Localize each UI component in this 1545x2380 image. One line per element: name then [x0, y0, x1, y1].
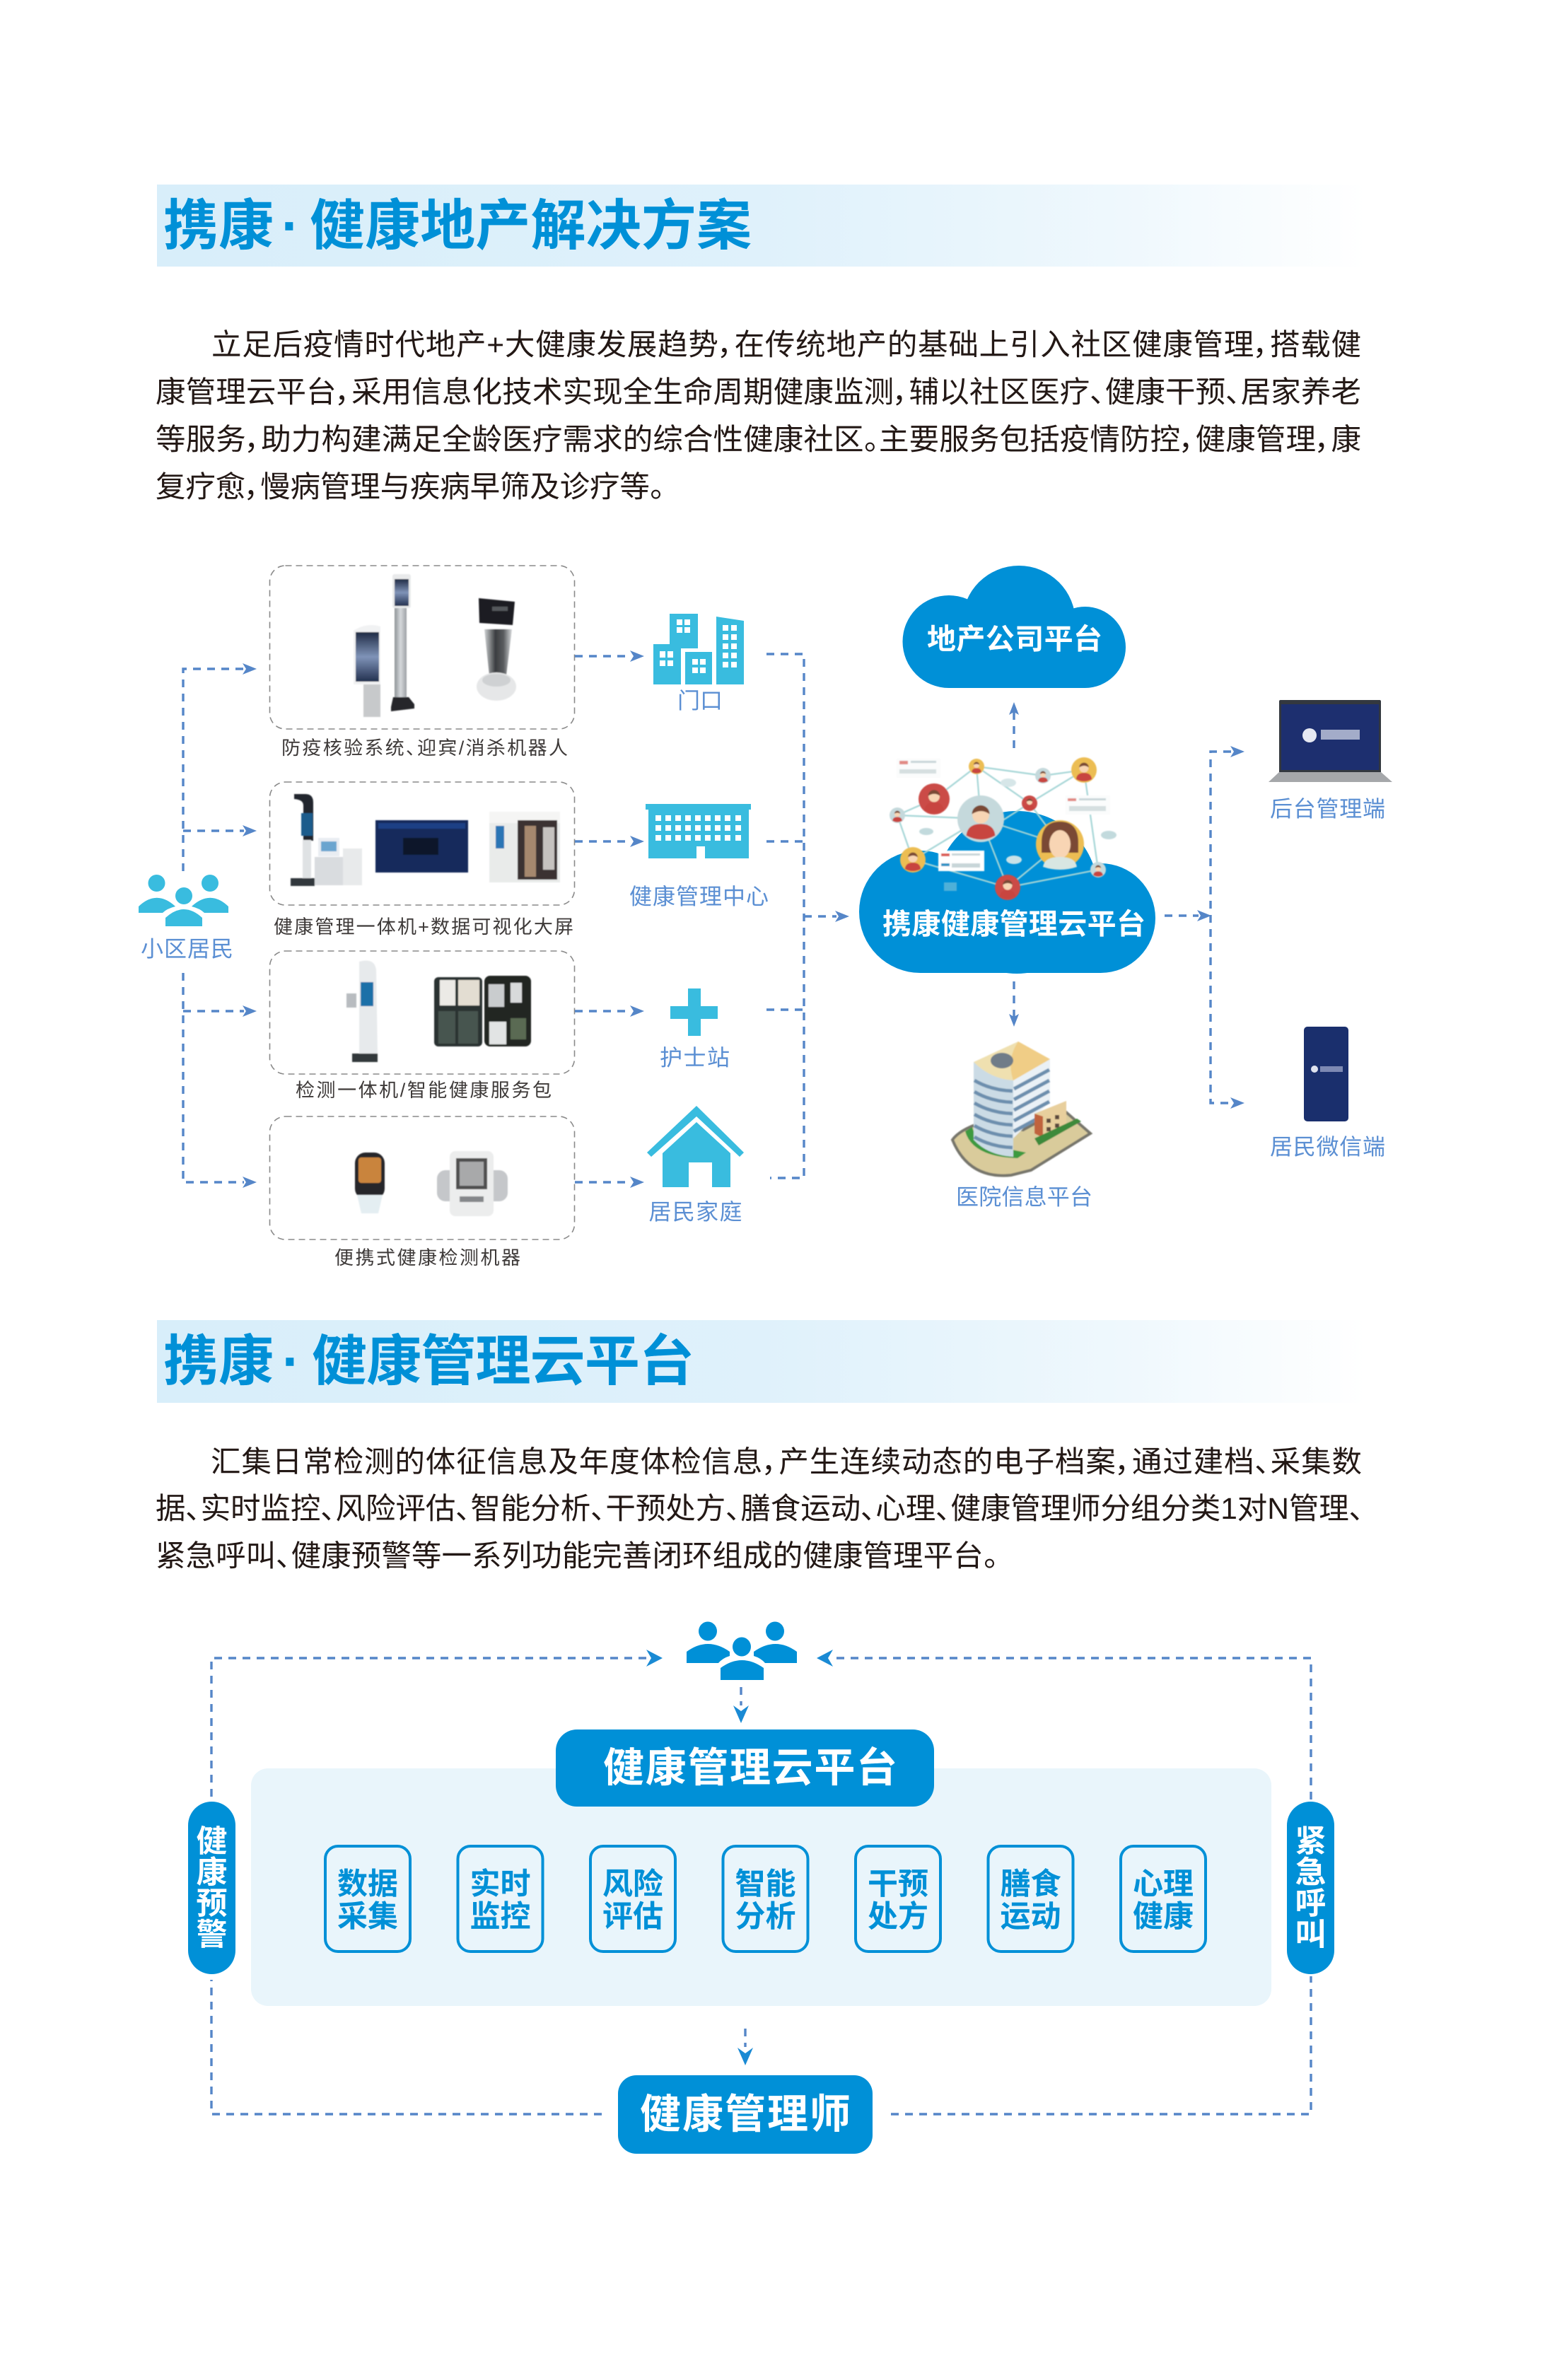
label: nurse station: 护士站: [660, 1045, 730, 1071]
pill: early warning: [188, 1802, 235, 1974]
connector: cloud platform to admin and WeChat clients: [1165, 746, 1244, 1109]
module: mental health: [1121, 1846, 1206, 1952]
cloud label: 地产公司平台: [927, 623, 1102, 655]
loop connector: health manager to early warning: [211, 1980, 602, 2114]
header: health management cloud platform: [556, 1729, 934, 1807]
title: 携康·健康管理云平台: 携康: [163, 1330, 274, 1392]
pill: early warning: 健: [197, 1824, 228, 1859]
box: health manager: [618, 2075, 873, 2154]
cloud: Xiekang health management platform: [859, 757, 1155, 974]
label: residents: 小区居民: [141, 936, 233, 962]
connector: access points to cloud platform: [766, 654, 849, 1178]
section banner: cloud platform: [157, 1320, 1366, 1403]
pill: emergency call: [1287, 1802, 1334, 1974]
module: intelligent analysis: 分析: [735, 1900, 796, 1934]
module: diet and exercise: [989, 1846, 1073, 1952]
module: data collection: [325, 1846, 410, 1952]
module: real-time monitoring: 实时: [470, 1867, 530, 1901]
module: diet and exercise: 运动: [1000, 1900, 1061, 1934]
intro paragraph 1: [156, 329, 1361, 504]
loop connector: health manager to emergency call: [891, 1976, 1311, 2114]
device photos: kiosk, dashboard, cabin: [291, 794, 560, 886]
device photos: kiosk, bag: [346, 960, 531, 1062]
module: intervention prescription: 处方: [868, 1900, 928, 1934]
module: intervention prescription: 干预: [868, 1867, 928, 1901]
title: 携康·健康地产解决方案: ·: [281, 194, 300, 257]
caption: epidemic devices: 防疫核验系统、迎宾/消杀机器人: [281, 737, 568, 759]
pill: emergency call: 呼: [1295, 1886, 1327, 1921]
caption: detection kiosk and service bag: 检测一体机/智能健康服务包: [296, 1080, 552, 1101]
panel: epidemic devices: [270, 566, 574, 729]
intro paragraph 2: 紧急呼叫、健康预警等一系列功能完善闭环组成的健康管理平台。: [156, 1540, 998, 1573]
icon: nurse station plus: [670, 988, 718, 1036]
label: resident WeChat client: 居民微信端: [1270, 1134, 1385, 1160]
pill: emergency call: 紧: [1295, 1824, 1327, 1859]
panel: detection kiosk and service bag: [270, 951, 574, 1074]
header: health management cloud platform: 健康管理云平台: [603, 1745, 897, 1791]
icon: residents: [139, 875, 228, 926]
arrow: cloud platform up to real estate platform: [1009, 702, 1019, 748]
arrow: cloud platform down to hospital: [1009, 981, 1019, 1027]
icon: gate buildings: [653, 614, 744, 684]
panel: platform modules background: [251, 1768, 1271, 2006]
label: admin client: 后台管理端: [1270, 796, 1385, 822]
section banner: real estate solution: [157, 185, 1366, 267]
module: risk assessment: 风险: [602, 1867, 663, 1901]
icon: residents group: [687, 1622, 797, 1680]
caption: health kiosk and big screen: 健康管理一体机+数据可视化大屏: [274, 916, 573, 938]
intro paragraph 1: 立足后疫情时代地产+大健康发展趋势，在传统地产的基础上引入社区健康管理，搭载健: [211, 329, 1361, 362]
intro paragraph 2: 据、实时监控、风险评估、智能分析、干预处方、膳食运动、心理、健康管理师分组分类1对N管理、: [156, 1493, 1364, 1526]
pill: emergency call: 叫: [1295, 1918, 1327, 1952]
intro paragraph 1: 康管理云平台，采用信息化技术实现全生命周期健康监测，辅以社区医疗、健康干预、居家养老: [156, 376, 1361, 409]
module: diet and exercise: 膳食: [1000, 1867, 1061, 1901]
cloud label: 携康健康管理云平台: [882, 908, 1145, 940]
loop connector: emergency call to residents: [817, 1650, 1311, 1799]
connector: device groups to access points: [575, 651, 644, 1188]
loop connector: early warning to residents: [211, 1650, 663, 1797]
intro paragraph 1: 复疗愈，慢病管理与疾病早筛及诊疗等。: [156, 471, 665, 504]
module: real-time monitoring: 监控: [470, 1900, 530, 1934]
title: 携康·健康地产解决方案: 健康地产解决方案: [310, 194, 752, 257]
arrow: platform to health manager: [737, 2029, 753, 2065]
arrow: residents to platform: [733, 1687, 749, 1723]
title: 携康·健康管理云平台: ·: [282, 1330, 301, 1392]
icon: laptop: [1269, 700, 1392, 782]
module: intelligent analysis: 智能: [735, 1867, 796, 1901]
icon: phone: [1304, 1027, 1348, 1121]
label: resident home: 居民家庭: [649, 1199, 742, 1225]
label: hospital information platform: 医院信息平台: [956, 1184, 1092, 1210]
module: real-time monitoring: [458, 1846, 543, 1952]
panel: portable devices: [270, 1116, 574, 1239]
pill: early warning: 康: [197, 1855, 228, 1890]
caption: portable devices: 便携式健康检测机器: [334, 1247, 520, 1268]
module: mental health: 健康: [1133, 1900, 1194, 1934]
intro paragraph 1: 等服务，助力构建满足全龄医疗需求的综合性健康社区。主要服务包括疫情防控，健康管理，康: [156, 424, 1361, 457]
module: intervention prescription: [856, 1846, 940, 1952]
box: health manager: 健康管理师: [640, 2092, 851, 2137]
module: intelligent analysis: [723, 1846, 808, 1952]
module: risk assessment: [590, 1846, 675, 1952]
intro paragraph 2: 汇集日常检测的体征信息及年度体检信息，产生连续动态的电子档案，通过建档、采集数: [211, 1446, 1362, 1479]
pill: early warning: 警: [197, 1918, 228, 1952]
module: data collection: 数据: [337, 1867, 398, 1901]
device photos: glucose meter, blood pressure monitor: [355, 1151, 508, 1216]
title: 携康·健康地产解决方案: 携康: [163, 194, 274, 257]
connector: residents to device groups: [183, 663, 257, 1188]
title: 携康·健康管理云平台: 健康管理云平台: [312, 1330, 694, 1392]
module: data collection: 采集: [337, 1900, 398, 1934]
icon: resident home: [647, 1106, 744, 1187]
intro paragraph 2: [156, 1446, 1364, 1573]
label: health management center: 健康管理中心: [629, 884, 769, 909]
device photos: kiosk, stand, robot: [354, 574, 516, 717]
network illustration: [890, 757, 1117, 900]
pill: early warning: 预: [197, 1886, 228, 1921]
cloud: real estate platform: [902, 566, 1126, 688]
label: gate: 门口: [677, 688, 723, 713]
icon: health management center: [646, 804, 751, 858]
illustration: hospital building: [952, 1042, 1090, 1176]
module: mental health: 心理: [1133, 1867, 1194, 1901]
panel: health kiosk and big screen: [270, 782, 574, 905]
module: risk assessment: 评估: [602, 1900, 663, 1934]
pill: emergency call: 急: [1295, 1855, 1327, 1890]
